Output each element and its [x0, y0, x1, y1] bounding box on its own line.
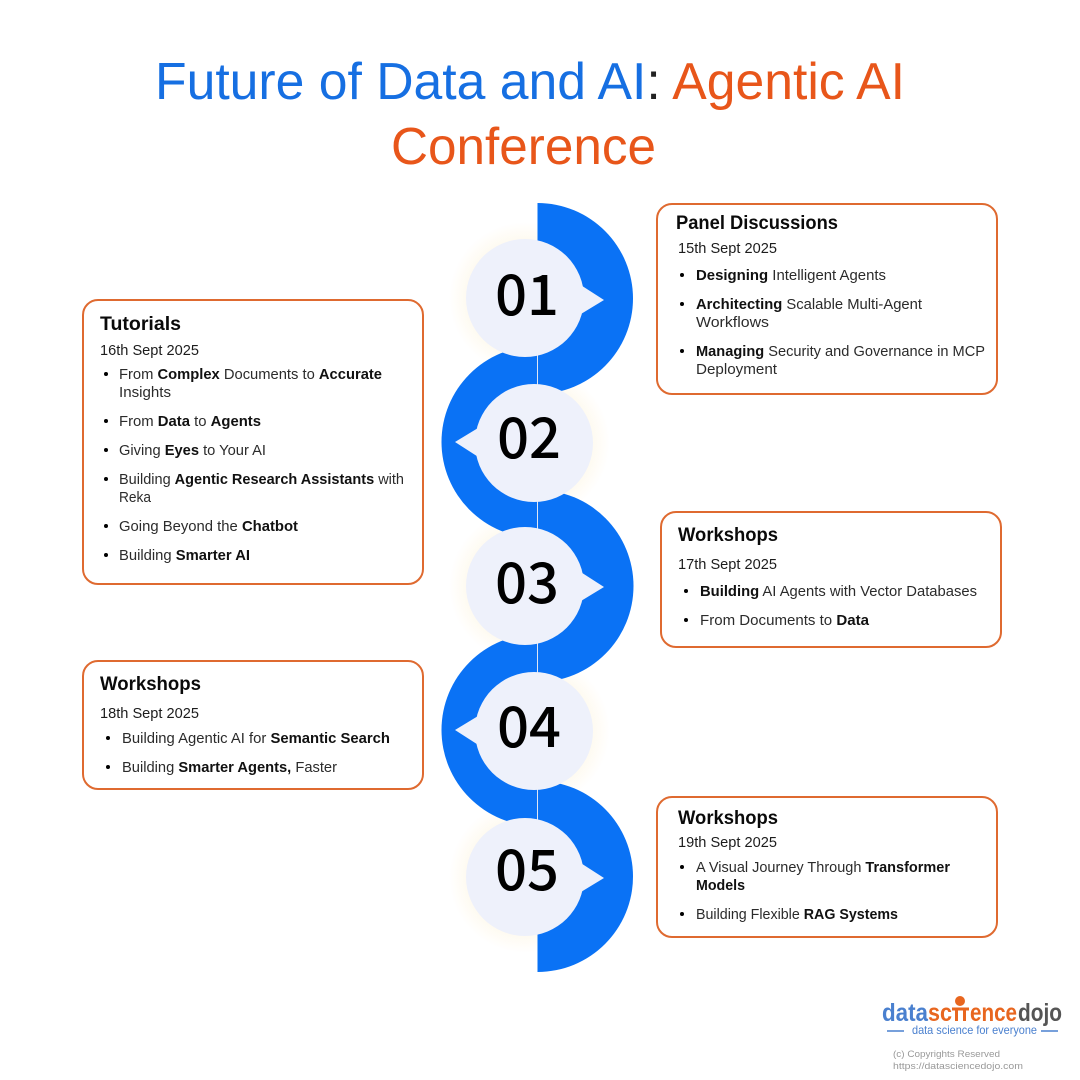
panel: tutorials: Insights — [119, 384, 171, 401]
step 01 marker: 01 — [495, 251, 559, 332]
step 02 marker: 02 — [497, 394, 561, 475]
panel: tutorials: 16th Sept 2025 — [100, 343, 199, 359]
panel: workshops 19th — [657, 797, 997, 937]
logo: sc — [928, 999, 952, 1027]
panel: workshops 18th: Building Agentic AI for Semantic Search — [122, 730, 390, 747]
panel: tutorials: From Complex Documents to Accurate — [119, 366, 382, 383]
step 02 marker — [455, 384, 593, 502]
step 04 marker — [455, 672, 593, 790]
panel: workshops 17th: From Documents to Data — [700, 612, 870, 629]
panel: workshops 19th: Workshops — [678, 808, 778, 829]
panel: panel discussions: 15th Sept 2025 — [678, 241, 777, 257]
logo: dojo — [1018, 999, 1062, 1027]
panel: tutorials: Building Smarter AI — [119, 547, 250, 564]
logo: data science for everyone — [912, 1023, 1037, 1037]
copyright: (c) Copyrights Reserved — [893, 1049, 1000, 1060]
panel: workshops 18th: Building Smarter Agents, Faster — [122, 759, 337, 776]
panel: panel discussions: Deployment — [696, 361, 778, 378]
logo — [882, 996, 1062, 1037]
copyright — [893, 1049, 1023, 1072]
panel: workshops 17th: Workshops — [678, 525, 778, 546]
panel: tutorials: Building Agentic Research Assistants with — [119, 471, 404, 488]
panel: workshops 19th: Building Flexible RAG Systems — [696, 906, 898, 923]
panel: workshops 18th: 18th Sept 2025 — [100, 706, 199, 722]
panel: panel discussions: Architecting Scalable Multi-Agent — [696, 296, 923, 313]
panel: panel discussions: Workflows — [696, 314, 769, 331]
panel: tutorials: Going Beyond the Chatbot — [119, 518, 298, 535]
panel: tutorials: Tutorials — [100, 314, 181, 335]
panel: tutorials — [83, 300, 423, 584]
step 04 marker: 04 — [497, 683, 561, 764]
panel: workshops 18th — [83, 661, 423, 789]
logo: data — [882, 999, 929, 1027]
connector line — [536, 340, 538, 860]
panel: panel discussions: Managing Security and Governance in MCP — [696, 343, 985, 360]
step 03 marker — [466, 527, 604, 645]
panel: tutorials: Giving Eyes to Your AI — [119, 442, 266, 459]
panel: panel discussions — [657, 204, 997, 394]
copyright: https://datasciencedojo.com — [893, 1061, 1023, 1072]
panel: workshops 18th: Workshops — [100, 674, 201, 695]
panel: panel discussions: Designing Intelligent Agents — [696, 267, 886, 284]
step 01 marker — [466, 239, 604, 357]
panel: tutorials: Reka — [119, 489, 152, 506]
panel: workshops 17th: 17th Sept 2025 — [678, 557, 777, 573]
panel: tutorials: From Data to Agents — [119, 413, 261, 430]
title — [155, 53, 905, 176]
blue half-disc arcs — [442, 203, 634, 972]
step 05 marker: 05 — [495, 826, 559, 907]
panel: workshops 19th: 19th Sept 2025 — [678, 835, 777, 851]
title: Future of Data and AI: Agentic AI — [155, 53, 905, 111]
step 03 marker: 03 — [495, 539, 559, 620]
step 05 marker — [466, 818, 604, 936]
panel: workshops 19th: Models — [696, 877, 745, 894]
glow accents — [449, 222, 610, 953]
logo: ence — [970, 999, 1017, 1027]
panel: panel discussions: Panel Discussions — [676, 213, 838, 234]
timeline spine — [442, 203, 634, 972]
title: Conference — [391, 118, 656, 176]
icon: logo figure — [952, 996, 969, 1021]
panel: workshops 19th: A Visual Journey Through Transformer — [696, 859, 950, 876]
panel: workshops 17th — [661, 512, 1001, 647]
panel: workshops 17th: Building AI Agents with Vector Databases — [700, 583, 977, 600]
